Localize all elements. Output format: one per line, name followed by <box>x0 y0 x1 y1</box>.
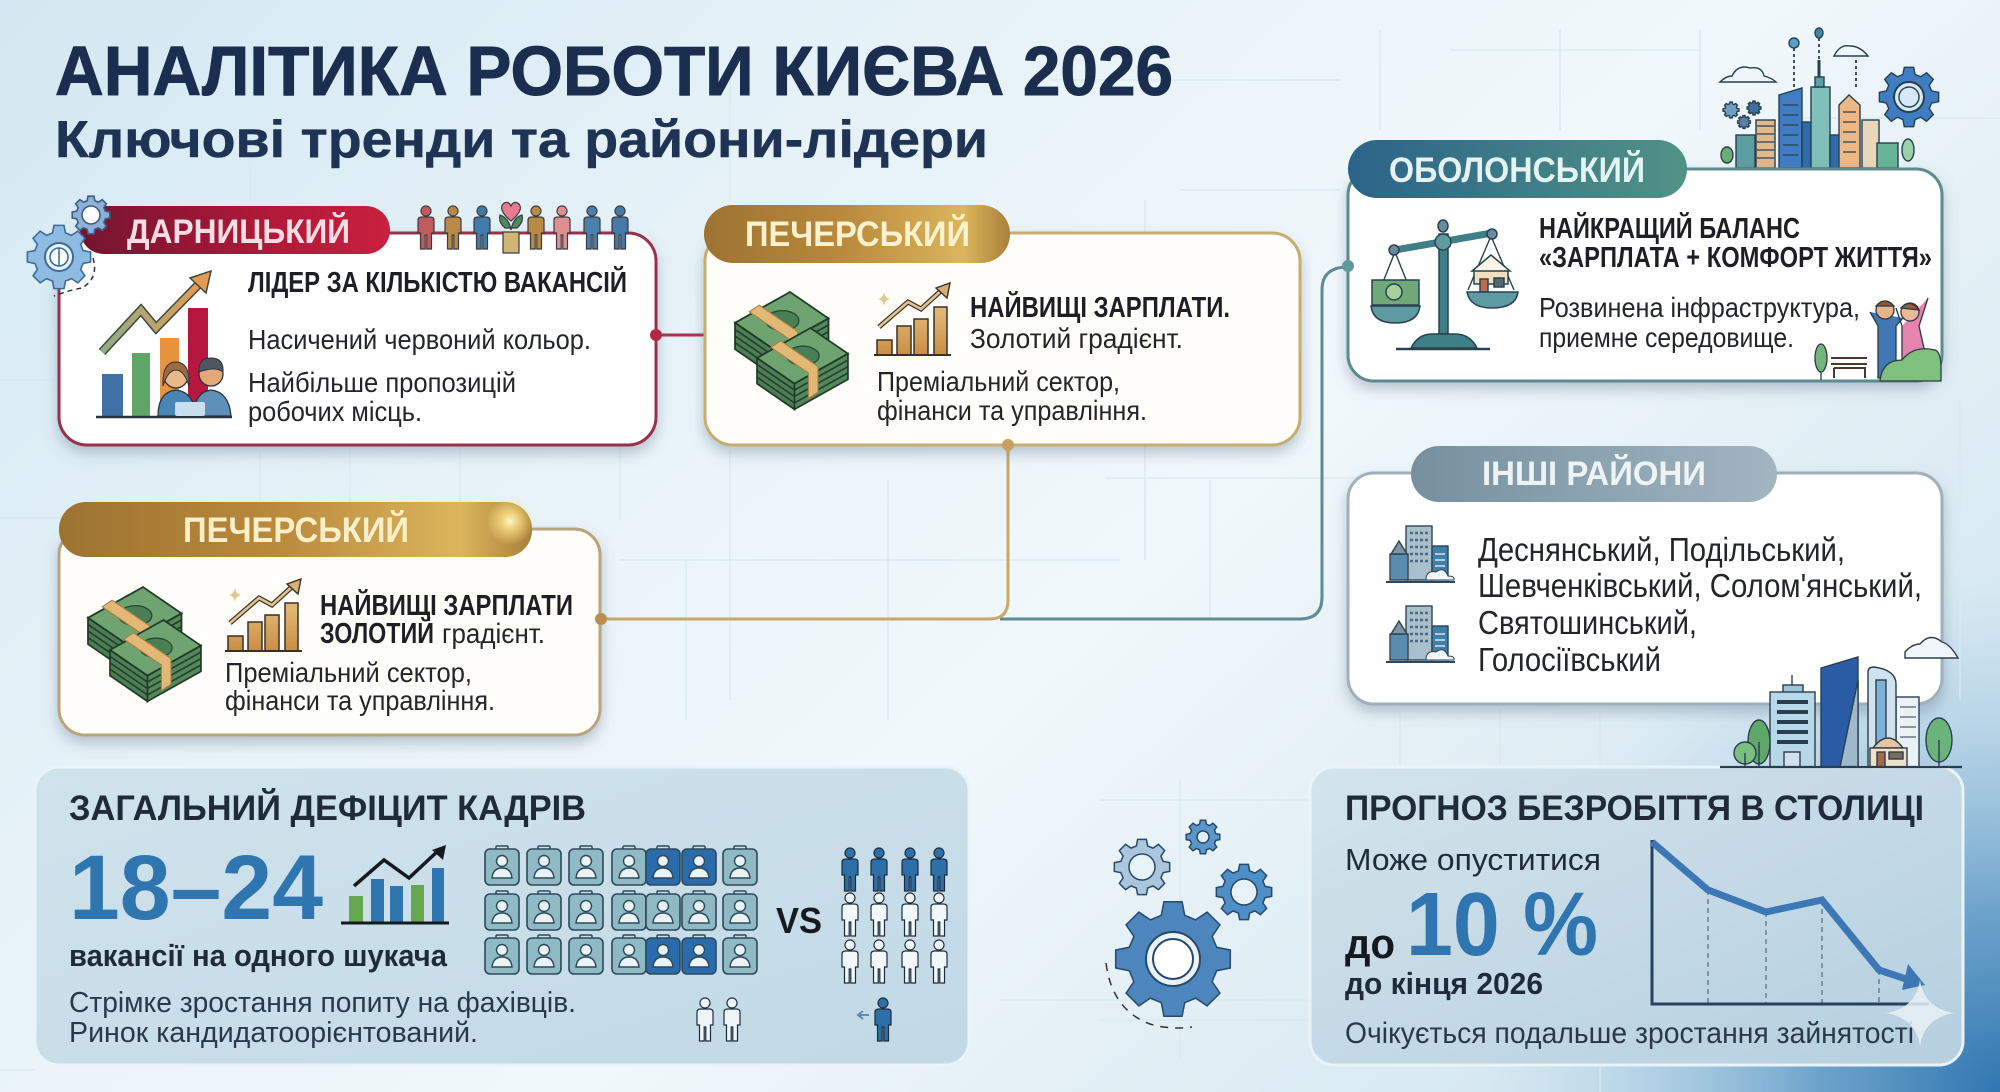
text: list of districts <box>1478 531 1922 678</box>
pill: Оболонський: ОБОЛОНСЬКИЙ <box>1389 150 1645 190</box>
text: employment note: Очікується подальше зростання зайнятості <box>1345 1017 1914 1050</box>
panel: Печерський top <box>704 205 1300 451</box>
text: Печерський top <box>877 290 1230 426</box>
text: Печерський bottom <box>225 588 573 716</box>
text: vacancies per seeker: вакансії на одного шукача <box>69 938 448 973</box>
text: list of districts: Шевченківський, Солом'янський, <box>1478 567 1922 604</box>
panel: Оболонський <box>1342 140 1942 381</box>
panel: прогноз безробіття <box>1310 767 1963 1065</box>
text: description <box>69 987 576 1049</box>
heading: ПРОГНОЗ БЕЗРОБІТТЯ В СТОЛИЦІ <box>1345 789 1924 828</box>
connector lines <box>601 267 1346 619</box>
icon: buildings blue <box>1386 526 1455 582</box>
text: Печерський top: фінанси та управління. <box>877 395 1147 426</box>
text: list of districts: Святошинський, <box>1478 604 1697 641</box>
text: description: Ринок кандидатоорієнтований. <box>69 1017 478 1049</box>
text: Дарницький: Найбільше пропозицій <box>248 367 516 398</box>
text: may drop: Може опуститися <box>1345 842 1601 877</box>
text: Печерський bottom: ЗОЛОТИЙ <box>320 616 434 650</box>
icon: growth chart <box>341 845 449 923</box>
text: Оболонський: Розвинена інфраструктура, <box>1539 292 1860 323</box>
text: Оболонський: приемне середовище. <box>1539 322 1794 353</box>
text: Дарницький: Насичений червоний кольор. <box>248 324 591 355</box>
icon: park with happy people <box>1815 298 1941 381</box>
text: Печерський top: НАЙВИЩІ ЗАРПЛАТИ. <box>970 290 1230 324</box>
pill: Оболонський <box>1348 140 1687 198</box>
line chart <box>1652 840 1929 1004</box>
text: end of 2026: до кінця 2026 <box>1345 966 1543 1001</box>
panel: загальний дефіцит кадрів <box>35 767 969 1065</box>
icon: gold chart <box>874 283 951 355</box>
connector dot <box>1342 260 1354 272</box>
text: Печерський bottom: НАЙВИЩІ ЗАРПЛАТИ <box>320 588 573 622</box>
card background <box>59 529 600 735</box>
text: Оболонський <box>1539 211 1932 353</box>
icon: money stacks <box>735 292 848 409</box>
pill: Печерський <box>704 205 1010 263</box>
card background <box>705 233 1300 445</box>
text: Дарницький <box>248 265 627 427</box>
text: Дарницький: ЛІДЕР ЗА КІЛЬКІСТЮ ВАКАНСІЙ <box>248 265 627 299</box>
connector dot <box>650 329 662 341</box>
panel background <box>35 767 969 1065</box>
text: до: до <box>1345 920 1395 967</box>
icon: vacancy badges grid <box>485 846 757 974</box>
pill: Інші райони <box>1411 446 1777 502</box>
icon: gold chart <box>225 579 302 651</box>
big number: 10 % <box>1406 875 1598 975</box>
text: description: Стрімке зростання попиту на фахівців. <box>69 987 576 1019</box>
heading: ЗАГАЛЬНИЙ ДЕФІЦИТ КАДРІВ <box>69 788 586 828</box>
icon: city skyline lower right <box>1720 637 1962 767</box>
pill: Печерський: ПЕЧЕРСЬКИЙ <box>183 510 409 550</box>
text: Печерський top: Преміальний сектор, <box>877 366 1120 397</box>
icon: buildings olive <box>1386 606 1455 662</box>
card background <box>1348 169 1942 381</box>
icon: two figures and one seeker <box>697 998 891 1041</box>
text: Дарницький: робочих місць. <box>248 396 422 427</box>
icon: city skyline top right <box>1720 28 1939 168</box>
text: vs: VS <box>776 900 822 941</box>
card background <box>1348 473 1942 704</box>
pill: Печерський <box>59 497 534 557</box>
text: Оболонський: НАЙКРАЩИЙ БАЛАНС <box>1539 211 1800 245</box>
text: Печерський bottom: Преміальний сектор, <box>225 657 472 688</box>
icon: balance scale <box>1371 220 1518 349</box>
pill: Дарницький <box>80 206 390 254</box>
panel: Печерський bottom <box>59 497 607 735</box>
title: АНАЛІТИКА РОБОТИ КИЄВА 2026 <box>55 32 1173 110</box>
icon: people row <box>418 202 628 253</box>
panel: Дарницький <box>27 196 662 445</box>
text: Печерський bottom: градієнт. <box>442 618 545 649</box>
text: Печерський bottom: фінанси та управління. <box>225 685 495 716</box>
text: list of districts: Голосіївський <box>1478 641 1661 678</box>
icon: gears <box>27 196 110 296</box>
connector dot <box>1002 439 1014 451</box>
text: Печерський top: Золотий градієнт. <box>970 323 1183 354</box>
icon: bar chart with arrow and people <box>96 271 232 417</box>
pill: Інші райони: ІНШІ РАЙОНИ <box>1482 454 1706 493</box>
icon: gears group <box>1106 820 1272 1028</box>
icon: sparkle <box>1886 980 1954 1046</box>
card background <box>59 233 656 445</box>
big number: 18–24 <box>69 837 323 939</box>
icon: money stacks <box>88 587 201 701</box>
pill: Печерський: ПЕЧЕРСЬКИЙ <box>745 214 970 254</box>
panel background <box>1310 767 1963 1065</box>
pill: Дарницький: ДАРНИЦЬКИЙ <box>127 212 350 251</box>
subtitle: Ключові тренди та райони-лідери <box>55 111 988 169</box>
connector dot <box>595 613 607 625</box>
panel: Інші райони <box>1348 446 1942 704</box>
icon: job seekers figures <box>842 848 947 983</box>
text: list of districts: Деснянський, Подільський, <box>1478 531 1845 568</box>
